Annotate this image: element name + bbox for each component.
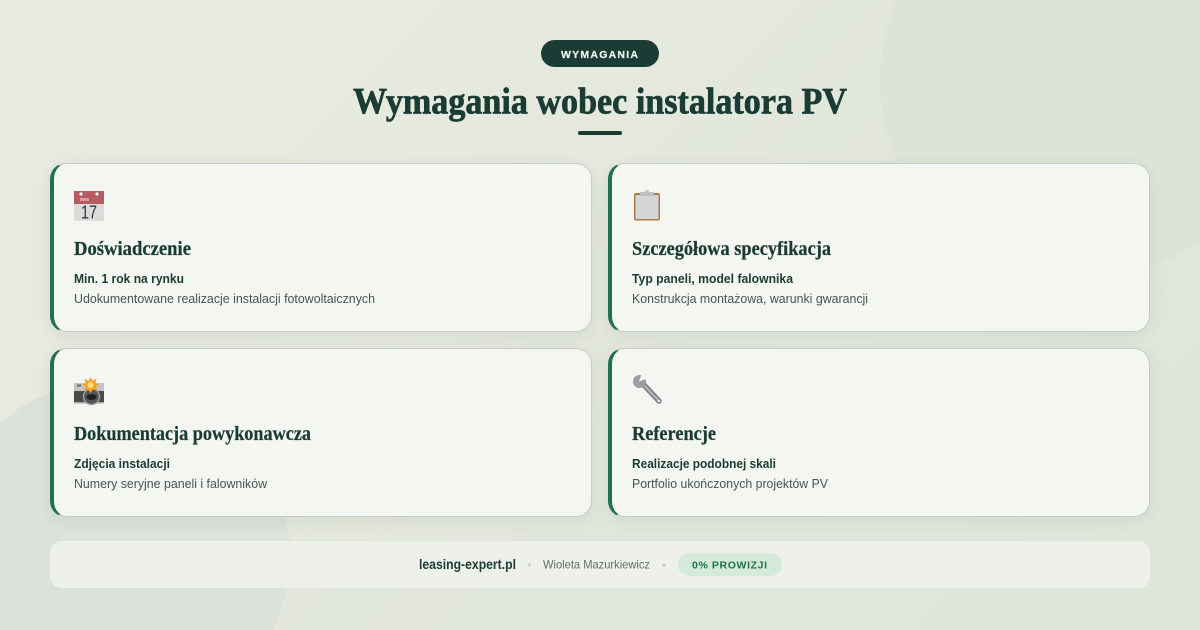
icon: camera with flash (74, 377, 104, 404)
bold line: Min. 1 rok na rynku (74, 272, 184, 286)
header pill: WYMAGANIA (561, 49, 638, 61)
brand name: leasing-expert.pl (419, 557, 516, 572)
description: Konstrukcja montażowa, warunki gwarancji (632, 292, 868, 306)
heading: Dokumentacja powykonawcza (74, 424, 311, 445)
panel: Szczegółowa specyfikacja (608, 163, 1150, 332)
icon: calendar: 17 (81, 202, 97, 222)
author name: Wioleta Mazurkiewicz (543, 558, 650, 572)
commission badge: 0% PROWIZJI (692, 560, 767, 572)
footer bar (50, 541, 1150, 588)
description: Portfolio ukończonych projektów PV (632, 477, 829, 491)
icon: calendar (74, 191, 104, 222)
title underline (578, 131, 622, 135)
header pill (541, 40, 659, 67)
icon: clipboard (634, 190, 660, 220)
icon: wrench (633, 373, 660, 402)
commission badge (678, 553, 782, 576)
bold line: Zdjęcia instalacji (74, 457, 170, 471)
description: Numery seryjne paneli i falowników (74, 477, 268, 491)
panel: Doświadczenie (50, 163, 592, 332)
description: Udokumentowane realizacje instalacji fotowoltaicznych (74, 292, 375, 306)
panel: Referencje (608, 348, 1150, 517)
heading: Szczegółowa specyfikacja (632, 239, 831, 260)
panel: Dokumentacja powykonawcza (50, 348, 592, 517)
heading: Referencje (632, 424, 716, 445)
bold line: Realizacje podobnej skali (632, 457, 776, 471)
bold line: Typ paneli, model falownika (632, 272, 794, 286)
heading: Doświadczenie (74, 239, 191, 260)
